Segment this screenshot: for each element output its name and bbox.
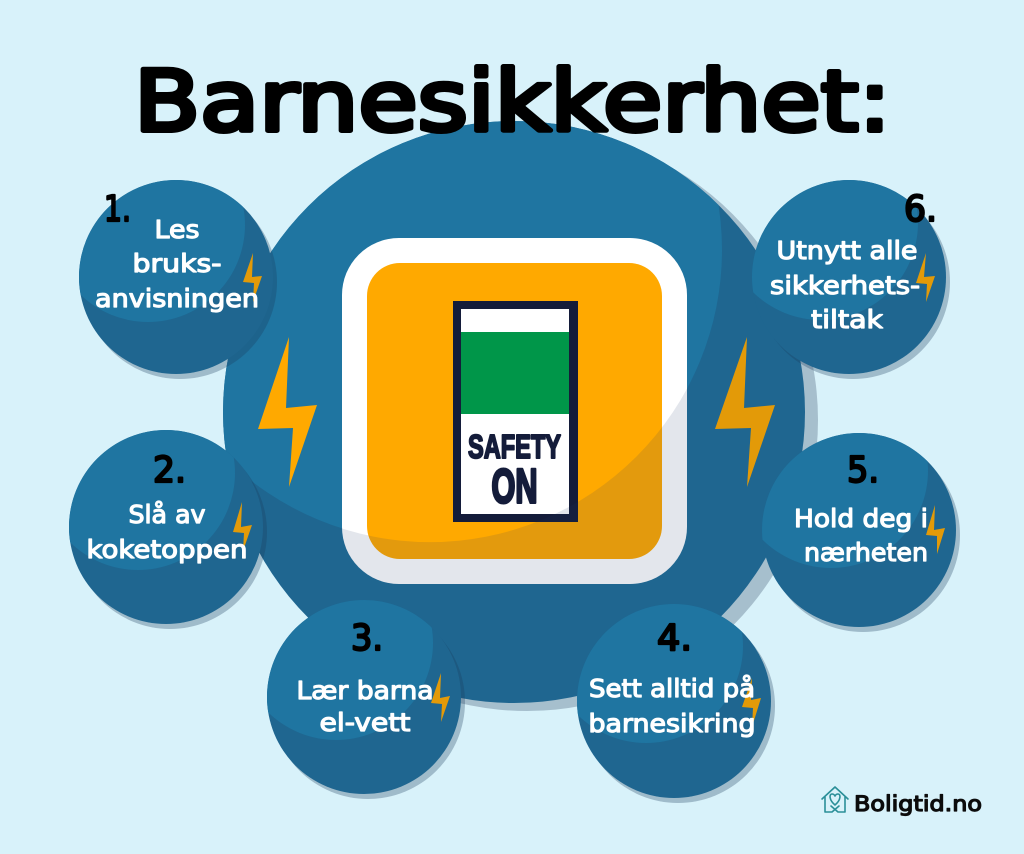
step 3: 3. bbox=[351, 618, 383, 659]
toggle label: SAFETY bbox=[468, 428, 561, 465]
step 4: Sett alltid på bbox=[589, 674, 755, 703]
step 6: sikkerhets- bbox=[770, 271, 920, 300]
toggle label bbox=[453, 301, 578, 522]
step 2: Slå av bbox=[128, 500, 206, 529]
step 4: barnesikring bbox=[588, 709, 756, 738]
step 3 bbox=[267, 600, 465, 799]
safety switch bbox=[342, 238, 687, 584]
central circle bbox=[223, 121, 818, 711]
step 4 bbox=[577, 604, 775, 803]
step 1: bruks- bbox=[132, 249, 222, 278]
icon: house with heart bbox=[822, 787, 848, 812]
icon: large lightning bolt left bbox=[258, 337, 317, 487]
switch plate bbox=[342, 238, 687, 584]
icon: large lightning bolt right bbox=[715, 337, 775, 487]
switch button bbox=[367, 263, 662, 559]
logo: Boligtid.no bbox=[854, 792, 982, 816]
step 2: koketoppen bbox=[86, 535, 248, 564]
logo bbox=[822, 787, 982, 816]
step 6: Utnytt alle bbox=[776, 236, 918, 265]
step 1: 1. bbox=[104, 189, 131, 230]
step 6: tiltak bbox=[811, 305, 884, 334]
step 5: 5. bbox=[847, 450, 879, 491]
step 1 bbox=[79, 180, 277, 379]
step 5: Hold deg i bbox=[794, 504, 928, 533]
step 5 bbox=[762, 433, 960, 632]
step 1: anvisningen bbox=[95, 284, 259, 313]
toggle label: ON bbox=[492, 460, 538, 514]
step 1: Les bbox=[154, 215, 200, 244]
title: Barnesikkerhet: bbox=[134, 52, 891, 150]
step 5: nærheten bbox=[804, 538, 928, 567]
step 3: Lær barna bbox=[296, 676, 434, 705]
step 3: el-vett bbox=[320, 708, 411, 737]
step 2 bbox=[69, 430, 267, 629]
step 6: 6. bbox=[904, 189, 937, 230]
step 4: 4. bbox=[657, 618, 692, 659]
step 2: 2. bbox=[153, 450, 186, 491]
step 6 bbox=[752, 180, 950, 379]
